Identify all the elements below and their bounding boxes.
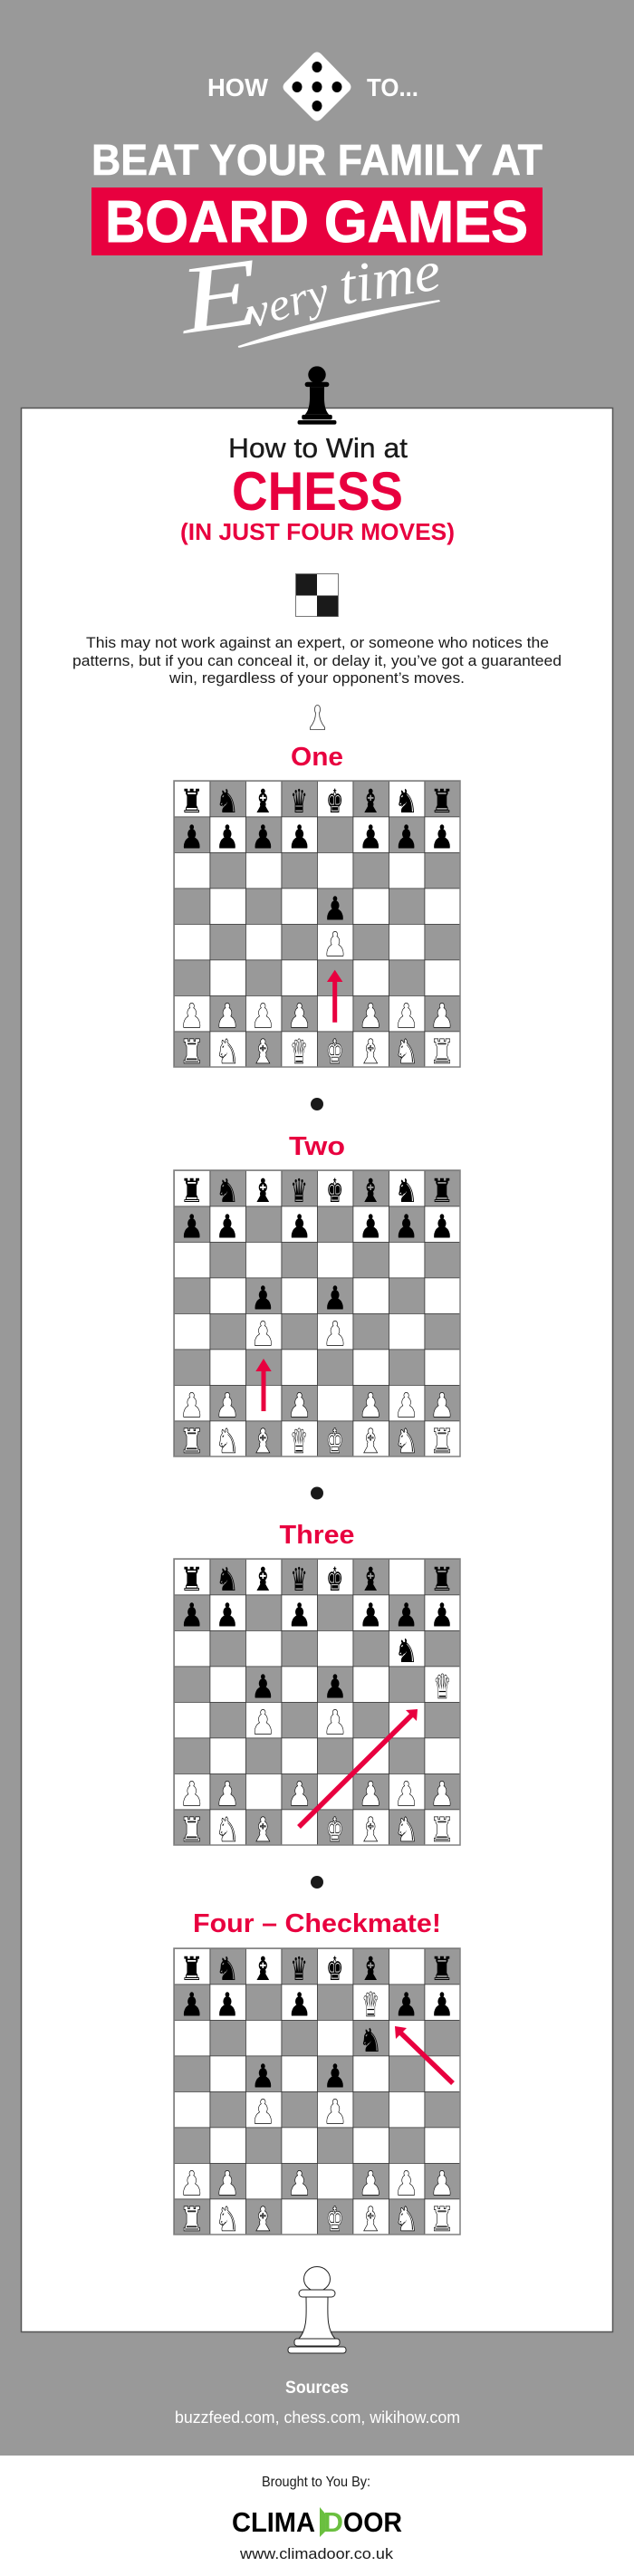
footer credit: [232, 2475, 402, 2562]
pieces: ♜♞♝♝♞♜: [179, 2200, 454, 2238]
how to line: HOW: [207, 73, 269, 101]
icon: black pawn: [298, 366, 336, 425]
logo: climadoor: CLIMA: [232, 2506, 315, 2538]
step heading: four checkmate: Four – Checkmate!: [193, 1909, 441, 1938]
pieces: ♜♞♝♝♜: [179, 1949, 454, 1988]
pieces: ♛♚: [291, 1423, 343, 1460]
pieces: ♚: [326, 2201, 343, 2238]
pieces: ♟♟♟♟♟♟: [179, 1207, 454, 1245]
headline: BEAT YOUR FAMILY AT: [91, 137, 543, 185]
dot divider: [311, 1098, 323, 1110]
section title: [180, 432, 455, 545]
icon: dice: [283, 53, 351, 121]
dot divider: [311, 1876, 323, 1889]
intro paragraph: win, regardless of your opponent’s moves.: [168, 670, 465, 687]
logo: climadoor: [232, 2506, 402, 2538]
pieces: ♟♟♟♟♟♟: [179, 1386, 454, 1425]
pieces: ♟♟♟♟♟: [179, 1985, 454, 2023]
pieces: ♟♟: [251, 2092, 347, 2131]
pieces: ♟♟: [251, 2057, 347, 2095]
pieces: ♚: [326, 1812, 343, 1849]
red banner: board games: BOARD GAMES: [105, 188, 528, 255]
how to line: [207, 73, 418, 101]
icon: small white pawn: [310, 705, 324, 730]
pieces: ♜♞♝♝♞♜: [179, 1811, 454, 1849]
pieces: ♜♞♝♝♞♜: [179, 1033, 454, 1071]
pieces: ♟♟♟♟♟♟: [179, 1596, 454, 1634]
pieces: ♟♟♟♟♟♟: [179, 2164, 454, 2203]
pieces: ♟♟: [251, 1703, 347, 1742]
section title: How to Win at: [228, 432, 408, 464]
pieces: ♛♚: [291, 1033, 343, 1071]
arrow: pawn advance: [255, 1359, 272, 1411]
pieces: [179, 1171, 454, 1460]
main white panel: [22, 408, 612, 2331]
intro paragraph: This may not work against an expert, or someone who notices the: [86, 635, 549, 651]
pieces: ♟♟: [251, 1314, 347, 1353]
pieces: ♜♞♝♝♞♜: [179, 782, 454, 821]
script tagline: every time: time: [335, 240, 445, 317]
pieces: ♟♟♟♟♟♟♟: [179, 996, 454, 1035]
intro paragraph: [72, 635, 562, 687]
pieces: ♟: [323, 925, 347, 964]
chess board: move four: [174, 1948, 460, 2238]
sources: buzzfeed.com, chess.com, wikihow.com: [175, 2408, 460, 2427]
logo: climadoor: D: [323, 2506, 343, 2538]
dot divider: [311, 1487, 323, 1500]
script tagline: every time: E: [171, 238, 266, 355]
pieces: ♜♞♝♝♜: [179, 1560, 454, 1599]
script tagline: every time: very: [241, 265, 335, 338]
how to line: TO...: [367, 73, 418, 101]
pieces: [179, 1949, 454, 2238]
icon: chequered square: [295, 574, 339, 616]
pieces: ♟♟: [251, 1279, 347, 1317]
arrow: pawn advance: [327, 970, 342, 1023]
pieces: ♟♟♟♟♟♟: [179, 1774, 454, 1813]
pieces: ♟♟♟♟♟♟♟: [179, 818, 454, 856]
pieces: ♛♚: [291, 783, 343, 821]
pieces: ♟: [323, 889, 347, 928]
step heading: two: Two: [289, 1132, 345, 1161]
step heading: three: Three: [279, 1521, 355, 1550]
section title: CHESS: [232, 461, 403, 522]
pieces: ♞: [394, 1631, 418, 1670]
logo: climadoor: OOR: [343, 2506, 402, 2538]
pieces: ♛♚: [291, 1172, 343, 1210]
sources: [175, 2379, 460, 2427]
pieces: ♜♞♝♝♞♜: [179, 1171, 454, 1210]
chess board: move two: [174, 1170, 460, 1460]
step heading: one: One: [291, 743, 343, 772]
arrow: queen takes: [395, 2026, 453, 2083]
section title: (IN JUST FOUR MOVES): [180, 518, 455, 545]
pieces: ♟♟: [251, 1668, 347, 1706]
pieces: ♛♚: [291, 1561, 343, 1599]
arrow: queen diagonal: [299, 1709, 418, 1827]
website: www.climadoor.co.uk: [239, 2545, 394, 2562]
chess board: move three: [174, 1559, 460, 1849]
pieces: ♛: [434, 1668, 451, 1706]
header: [91, 53, 543, 355]
brought to you by: Brought to You By:: [262, 2475, 370, 2490]
pieces: [179, 1560, 454, 1849]
pieces: ♜♞♝♝♞♜: [179, 1422, 454, 1460]
sources: Sources: [285, 2379, 349, 2398]
pieces: [179, 782, 454, 1071]
pieces: ♛♚: [291, 1950, 343, 1988]
chess board: move one: [174, 781, 460, 1071]
intro paragraph: patterns, but if you can conceal it, or delay it, you’ve got a guaranteed: [72, 653, 562, 669]
pieces: ♞: [359, 2021, 383, 2060]
pieces: ♛: [362, 1986, 379, 2023]
icon: large white pawn: [288, 2266, 346, 2353]
script tagline: every time: [171, 238, 445, 355]
